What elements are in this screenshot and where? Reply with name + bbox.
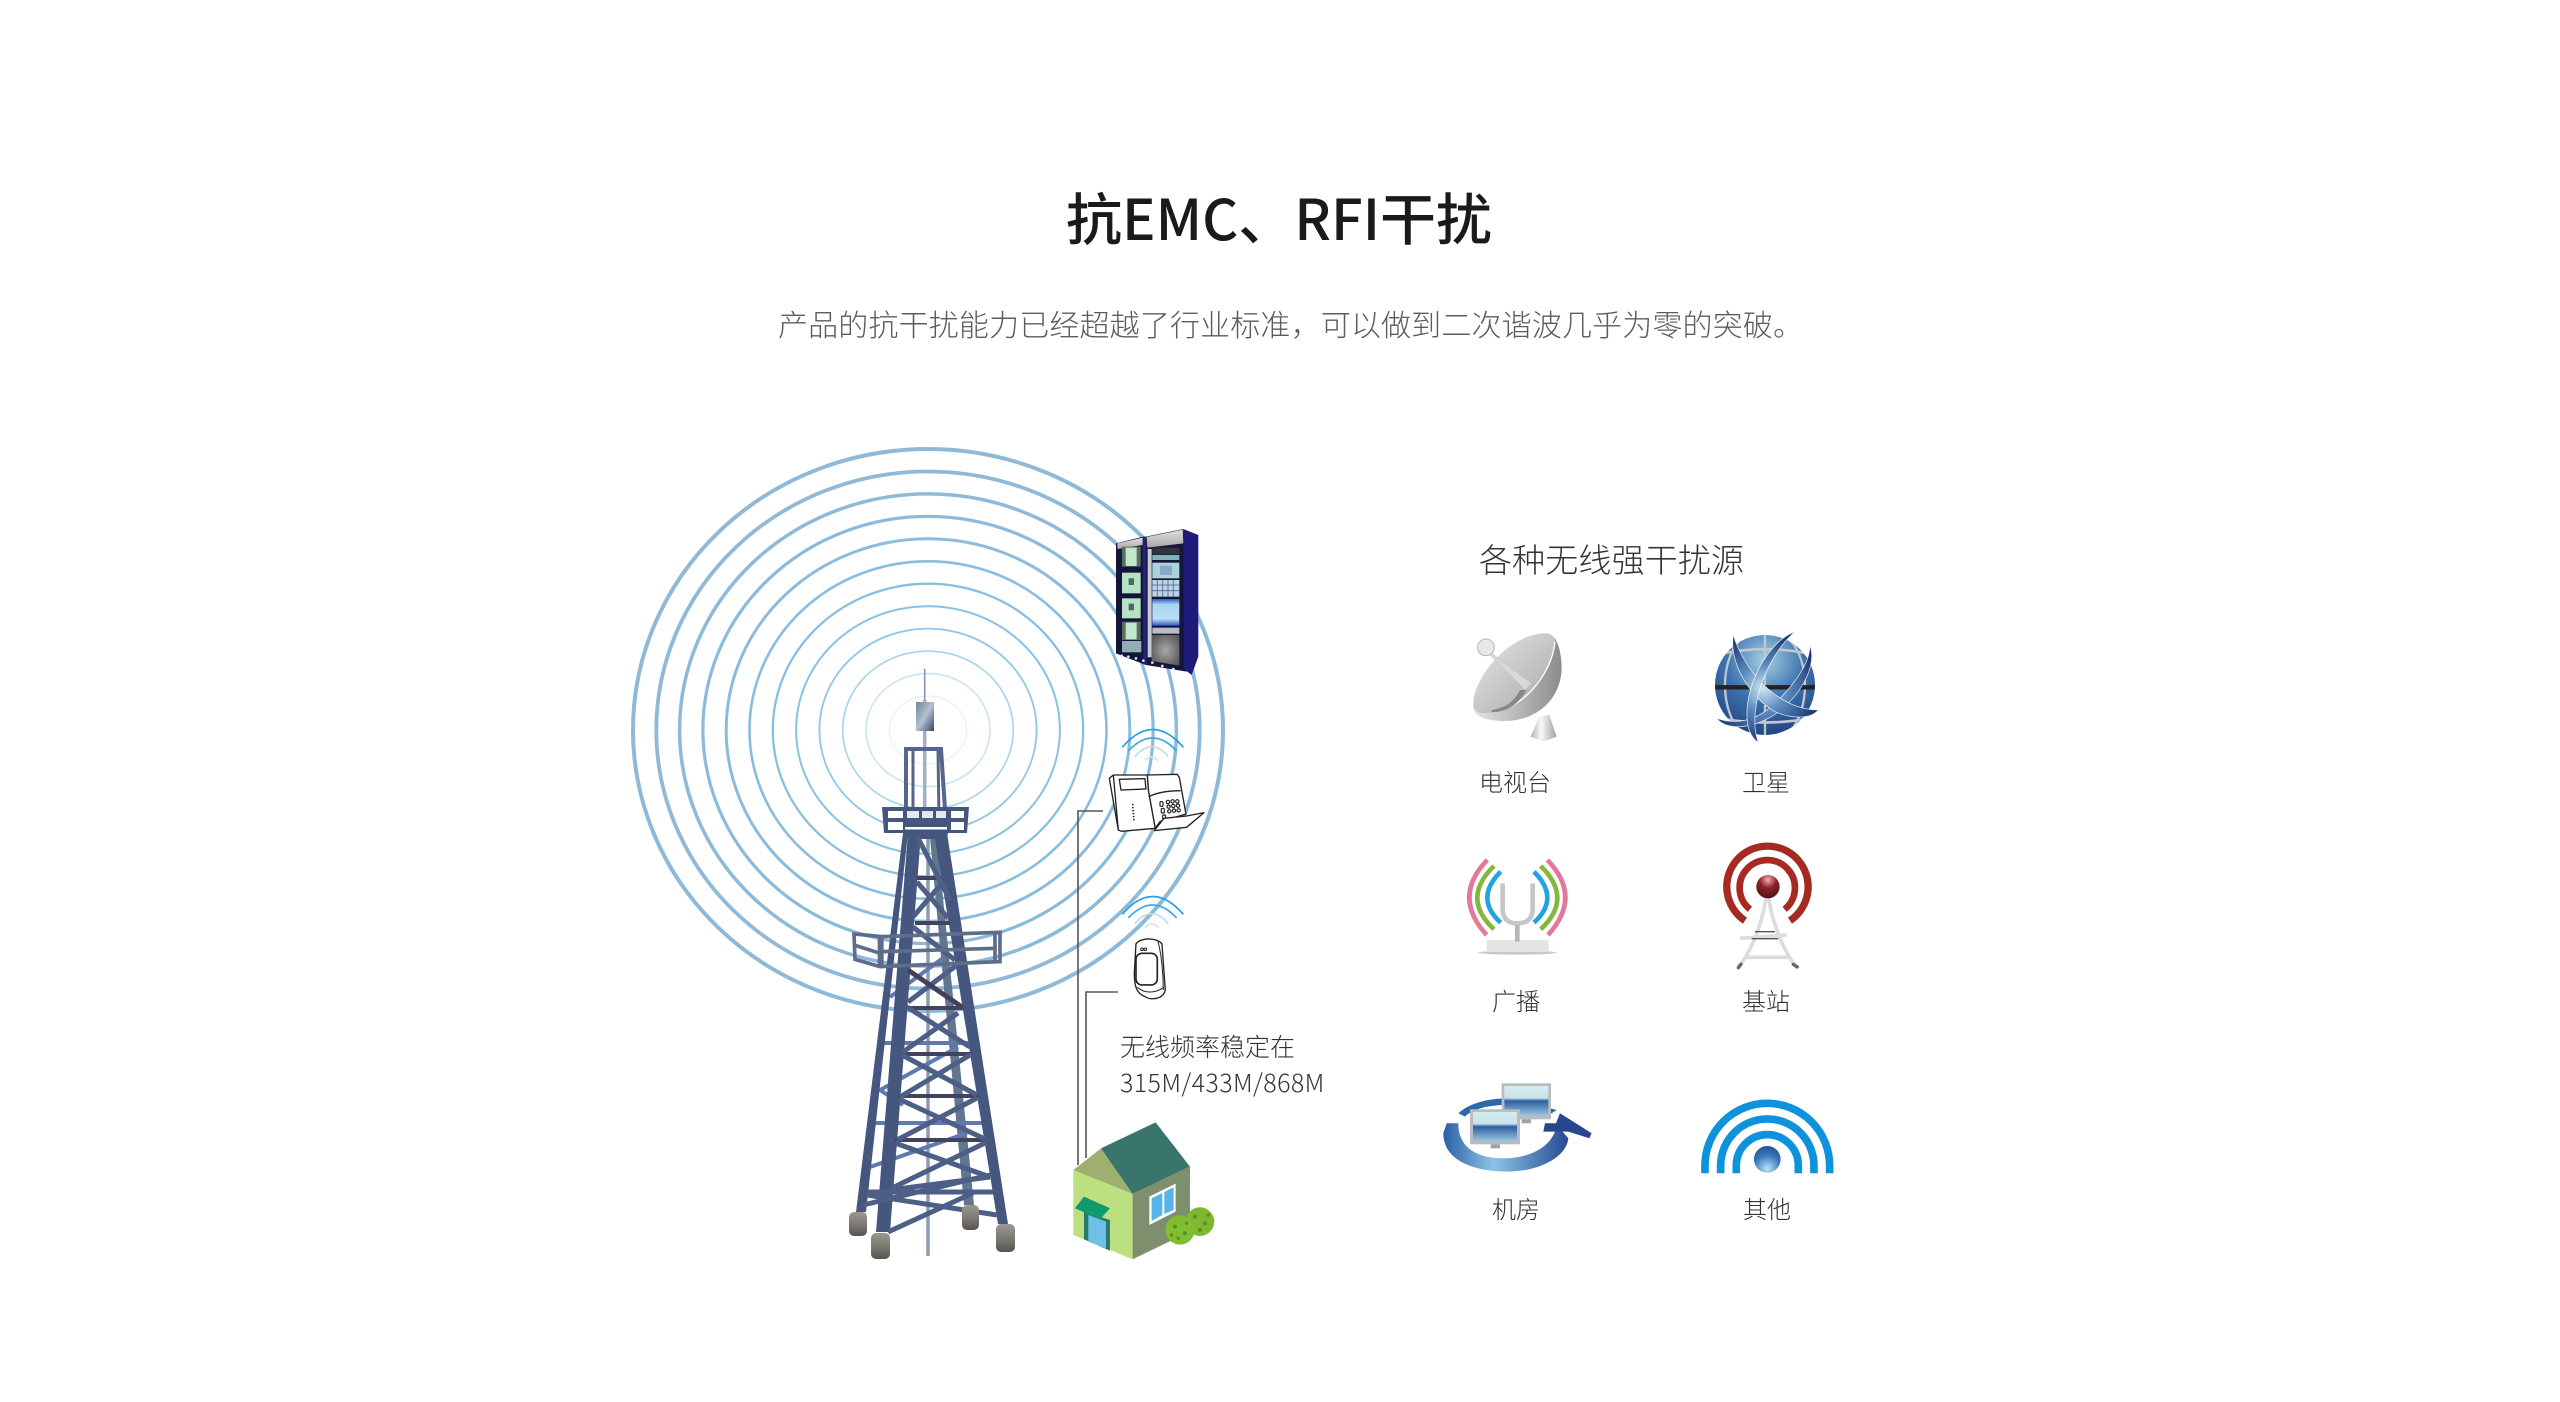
mid platform bbox=[854, 932, 1000, 967]
frequency note: 无线频率稳定在 bbox=[1120, 1028, 1295, 1064]
icon: motion sensor bbox=[1134, 939, 1165, 999]
infographic canvas bbox=[631, 192, 1834, 1260]
rear leg bbox=[930, 838, 974, 1205]
frequency note: 315M/433M/868M bbox=[1120, 1064, 1325, 1100]
frequency note bbox=[1120, 1028, 1325, 1100]
diagonal braces bbox=[863, 838, 997, 1232]
mast bbox=[916, 669, 934, 1256]
label: satellite: 卫星 bbox=[1742, 763, 1790, 798]
subtitle: 产品的抗干扰能力已经超越了行业标准，可以做到二次谐波几乎为零的突破。 bbox=[778, 301, 1803, 345]
icon: satellite globe bbox=[1713, 632, 1818, 742]
icon: computer room bbox=[1443, 1083, 1592, 1172]
icon: house bbox=[1073, 1122, 1214, 1259]
icon: base station bbox=[1727, 846, 1808, 968]
alarm panel wifi arcs bbox=[1122, 729, 1183, 761]
label: broadcast: 广播 bbox=[1492, 982, 1540, 1017]
icon: satellite dish bbox=[1473, 633, 1562, 742]
dark cross bars bbox=[895, 878, 985, 1140]
signal rings bbox=[633, 449, 1223, 1011]
icon: broadcast antenna bbox=[1469, 860, 1565, 955]
label: base station: 基站 bbox=[1742, 982, 1790, 1017]
blue bracing bbox=[870, 958, 983, 1167]
connector lines bbox=[1078, 811, 1118, 1165]
label: computer room: 机房 bbox=[1492, 1190, 1540, 1225]
icon: alarm control panel bbox=[1109, 774, 1204, 831]
title: 抗EMC、RFI干扰 bbox=[1066, 176, 1492, 257]
label: TV station: 电视台 bbox=[1479, 763, 1551, 798]
top platform bbox=[882, 807, 969, 833]
icon: server racks bbox=[1116, 529, 1198, 675]
icon: wireless signal bbox=[1705, 1103, 1830, 1173]
tower legs bbox=[856, 832, 1008, 1232]
sensor wifi arcs bbox=[1122, 896, 1183, 928]
tower bbox=[849, 669, 1015, 1259]
tower feet bbox=[849, 1205, 1015, 1259]
label: other: 其他 bbox=[1743, 1190, 1791, 1225]
right heading: 各种无线强干扰源 bbox=[1479, 534, 1744, 582]
top frame bbox=[906, 749, 945, 820]
